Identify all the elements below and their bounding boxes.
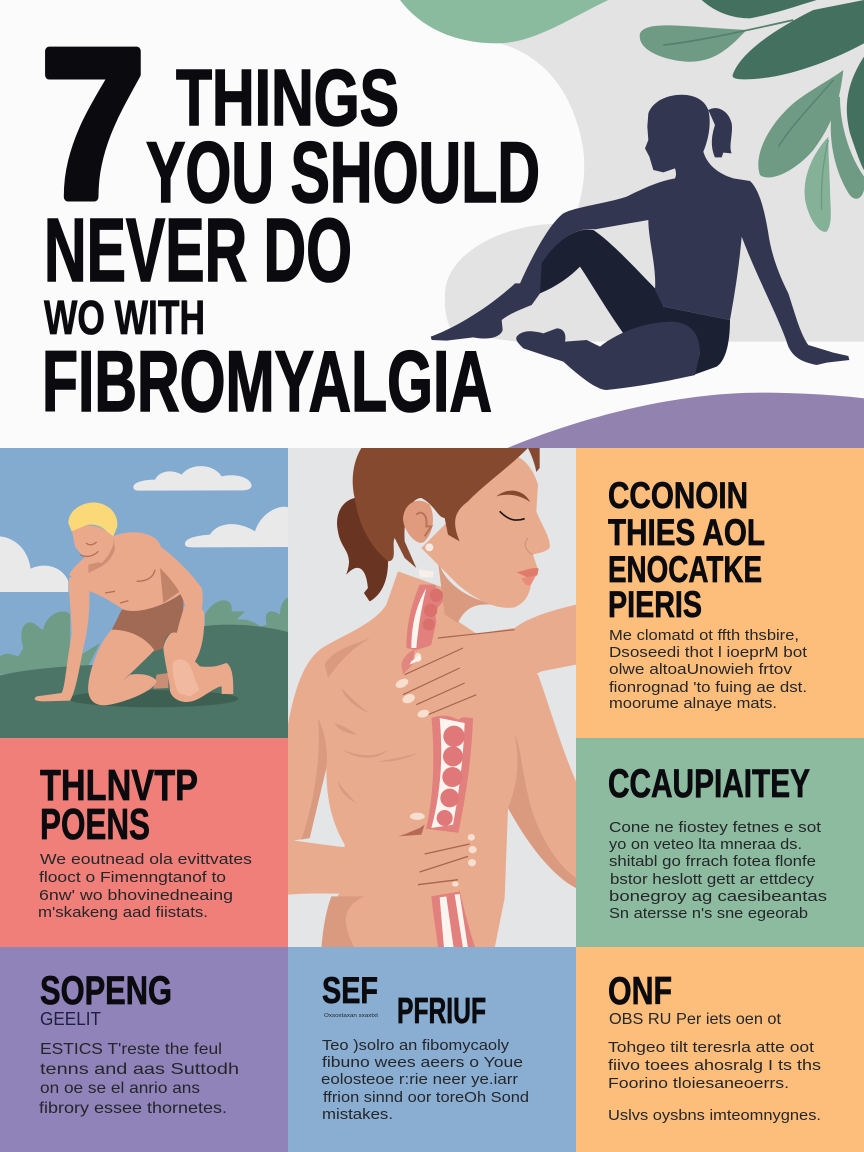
panel: orange top right [576, 448, 864, 738]
title line: WO WITH: WO WITH [44, 292, 205, 345]
body text [608, 1039, 821, 1124]
ground [0, 625, 288, 738]
heading: ONF [608, 970, 672, 1013]
header scene: background shapes and leaves [400, 0, 864, 448]
clouds [0, 466, 288, 592]
body text: tenns and aas Suttodh [40, 1061, 239, 1078]
panel: kneeling man illustration [0, 448, 288, 738]
body text: Uslvs oysbns imteomnygnes. [608, 1107, 821, 1124]
body text: mistakes. [322, 1106, 393, 1123]
panel: orange bottom right [576, 947, 864, 1152]
body text [609, 627, 808, 712]
spine lower section [425, 715, 473, 835]
title numeral 7: 7 [41, 5, 145, 242]
body text: fibuno wees aeers o Youe [322, 1054, 523, 1071]
title line: FIBROMYALGIA: FIBROMYALGIA [42, 334, 492, 430]
leaves [640, 0, 864, 232]
body text: moorume alnaye mats. [609, 695, 777, 712]
heading: PFRIUF: PFRIUF [397, 990, 486, 1031]
body text: Cone ne fiostey fetnes e sot [609, 819, 822, 836]
spine upper section [406, 570, 443, 651]
subheading: OBS RU Per iets oen ot [609, 1011, 782, 1028]
body text: 6nw' wo bhovinedneaing [39, 887, 233, 904]
panel: blue bottom centre [288, 947, 576, 1152]
body text: bonegroy ag caesibeantas [609, 888, 827, 905]
body text: fionrognad 'to fuing ae dst. [609, 679, 807, 696]
body text: ESTICS T'reste the feul [40, 1041, 222, 1058]
body text [39, 1041, 239, 1117]
title line: NEVER DO: NEVER DO [44, 201, 352, 301]
back and torso [288, 571, 576, 948]
body text [321, 1037, 529, 1123]
body text: Dsoseedi thot l ioeprM bot [609, 644, 808, 661]
title [41, 5, 540, 430]
subheading: GEELIT [40, 1009, 101, 1029]
upper hand and arm [394, 605, 576, 720]
body text [609, 819, 827, 922]
body text [38, 851, 252, 921]
heading: THIES AOL [608, 512, 765, 553]
kneeling man [35, 502, 233, 705]
purple wave [507, 393, 864, 448]
panel: purple bottom left [0, 947, 288, 1152]
body text: ffrion sinnd oor toreOh Sond [323, 1089, 529, 1106]
body shadows [301, 561, 576, 948]
face and head [337, 448, 550, 608]
body text: m'skakeng aad fiistats. [38, 904, 208, 921]
lower hand [288, 812, 477, 896]
heading: THLNVTP [40, 761, 198, 810]
heading: ENOCATKE [608, 549, 762, 590]
panel: green right [576, 738, 864, 947]
body text: Me clomatd ot ffth thsbire, [609, 627, 799, 644]
body text: Tohgeo tilt teresrla atte oot [608, 1039, 815, 1056]
spine bottom section [431, 891, 475, 948]
body text: flooct o Fimenngtanof to [39, 869, 226, 886]
tiny caption: Oxsoxtaxan sxaxtxt [324, 1013, 379, 1019]
heading [40, 761, 198, 849]
body text: on oe se el anrio ans [40, 1080, 200, 1097]
body text: Sn atersse n's sne egeorab [609, 905, 808, 922]
body text: Teo )solro an fibomycaoly [322, 1037, 510, 1054]
panel: woman's back and spine illustration [288, 448, 576, 948]
gray background blob [445, 0, 864, 342]
heading: SEF: SEF [322, 970, 378, 1011]
green blob [400, 0, 608, 43]
body text: We eoutnead ola evittvates [40, 851, 252, 868]
body text: fibrory essee thornetes. [39, 1100, 227, 1117]
sitting woman silhouette [431, 95, 849, 390]
body text: fiivo toees ahosralg I ts ths [608, 1057, 821, 1074]
heading [608, 475, 765, 625]
body text: yo on veteo lta mneraa ds. [609, 836, 802, 853]
body text: eolosteoe r:rie neer ye.iarr [321, 1071, 518, 1088]
title line: YOU SHOULD: YOU SHOULD [146, 125, 540, 221]
heading: CCONOIN [608, 475, 748, 516]
body text: Foorino tloiesaneoerrs. [608, 1075, 789, 1092]
title line: THINGS: THINGS [176, 53, 399, 142]
heading: POENS [40, 800, 150, 849]
heading: PIERIS [608, 584, 702, 625]
heading: SOPENG [40, 969, 172, 1013]
panel: red left [0, 738, 288, 947]
bushes [0, 598, 288, 675]
body text: olwe altoaUnowieh frtov [609, 661, 793, 678]
body text: shitabl go frrach fotea flonfe [609, 853, 816, 870]
body text: bstor heslott gett ar ettdecy [610, 871, 815, 888]
